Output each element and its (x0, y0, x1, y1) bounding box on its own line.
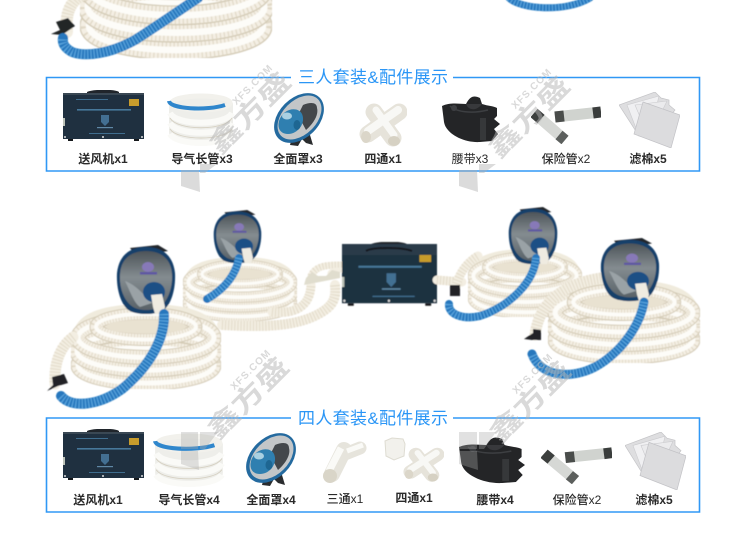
blue hose fragment right (509, 0, 590, 8)
watermark: top right: XFS.COM (510, 67, 555, 112)
item: waist belt (442, 96, 500, 166)
heading: 四人套装&配件展示 (298, 409, 448, 428)
watermark: top left: XFS.COM (231, 63, 276, 108)
watermark: bottom left: 鑫方盛 (201, 351, 295, 445)
panel border (46, 78, 700, 171)
panel: four-person kit (46, 409, 700, 512)
watermark logo: top right (459, 164, 496, 192)
watermark: top left: 鑫方盛 (203, 66, 297, 160)
main product photo: four-person set (47, 207, 697, 404)
watermark: bottom left: XFS.COM (229, 348, 274, 393)
item: waist belt: 腰带x3 (452, 152, 489, 166)
watermark: top left (198, 61, 297, 160)
watermark: top right: 鑫方盛 (482, 70, 576, 164)
watermark logo: bottom left (181, 432, 218, 470)
hoses into connector (222, 265, 343, 326)
item: long air hose: 导气长管x3 (171, 151, 233, 166)
item: blower: 送风机x1 (73, 492, 123, 507)
item: blower: 送风机x1 (78, 151, 128, 166)
item: full face mask (264, 83, 334, 166)
item: blower (62, 90, 144, 166)
watermark: bottom right (478, 350, 577, 449)
panel: three-person kit (46, 68, 700, 171)
item: four-way connector and nut: 四通x1 (395, 490, 433, 505)
rear-right coil with mask (449, 207, 580, 317)
item: four-way connector (361, 110, 402, 166)
front-right coil with mask (524, 238, 697, 374)
item: filter cotton (625, 432, 686, 507)
watermark: bottom right: XFS.COM (511, 352, 556, 397)
item: full face mask: 全面罩x3 (273, 151, 323, 166)
watermark: top right (477, 65, 576, 164)
hose from blower to right (437, 280, 462, 282)
item: fuses (534, 112, 601, 166)
watermark: bottom right: 鑫方盛 (483, 355, 577, 449)
panel border (46, 418, 700, 512)
item: fuses (544, 453, 612, 507)
item: filter cotton: 滤棉x5 (635, 492, 673, 507)
item: long air hose: 导气长管x4 (158, 492, 220, 507)
watermark logo: bottom right (459, 432, 496, 470)
item: waist belt: 腰带x4 (476, 492, 514, 507)
item: tee connector (323, 445, 364, 506)
blower unit (341, 242, 437, 306)
item: four-way connector: 四通x1 (364, 151, 402, 166)
item: filter cotton: 滤棉x5 (629, 151, 667, 166)
white hose with clip (51, 0, 80, 35)
blue hose (63, 0, 198, 54)
item: blower (62, 429, 144, 507)
item: full face mask: 全面罩x4 (246, 492, 296, 507)
item: four-way connector and nut (385, 438, 438, 505)
top product photo: cropped hose coil (51, 0, 590, 58)
item: full face mask (236, 423, 306, 507)
hose coil fragment (84, 0, 268, 58)
item: long air hose (169, 96, 233, 166)
front-left coil with mask (47, 245, 218, 404)
watermark: bottom left (196, 346, 295, 445)
item: filter cotton (619, 92, 680, 166)
item: fuses: 保险管x2 (542, 151, 591, 166)
rear-left coil with mask (185, 210, 295, 321)
heading: 三人套装&配件展示 (298, 68, 448, 87)
item: long air hose (155, 436, 223, 507)
item: fuses: 保险管x2 (553, 492, 602, 507)
item: waist belt (459, 437, 525, 507)
watermark logo: top left (181, 164, 217, 192)
item: tee connector: 三通x1 (327, 492, 364, 506)
